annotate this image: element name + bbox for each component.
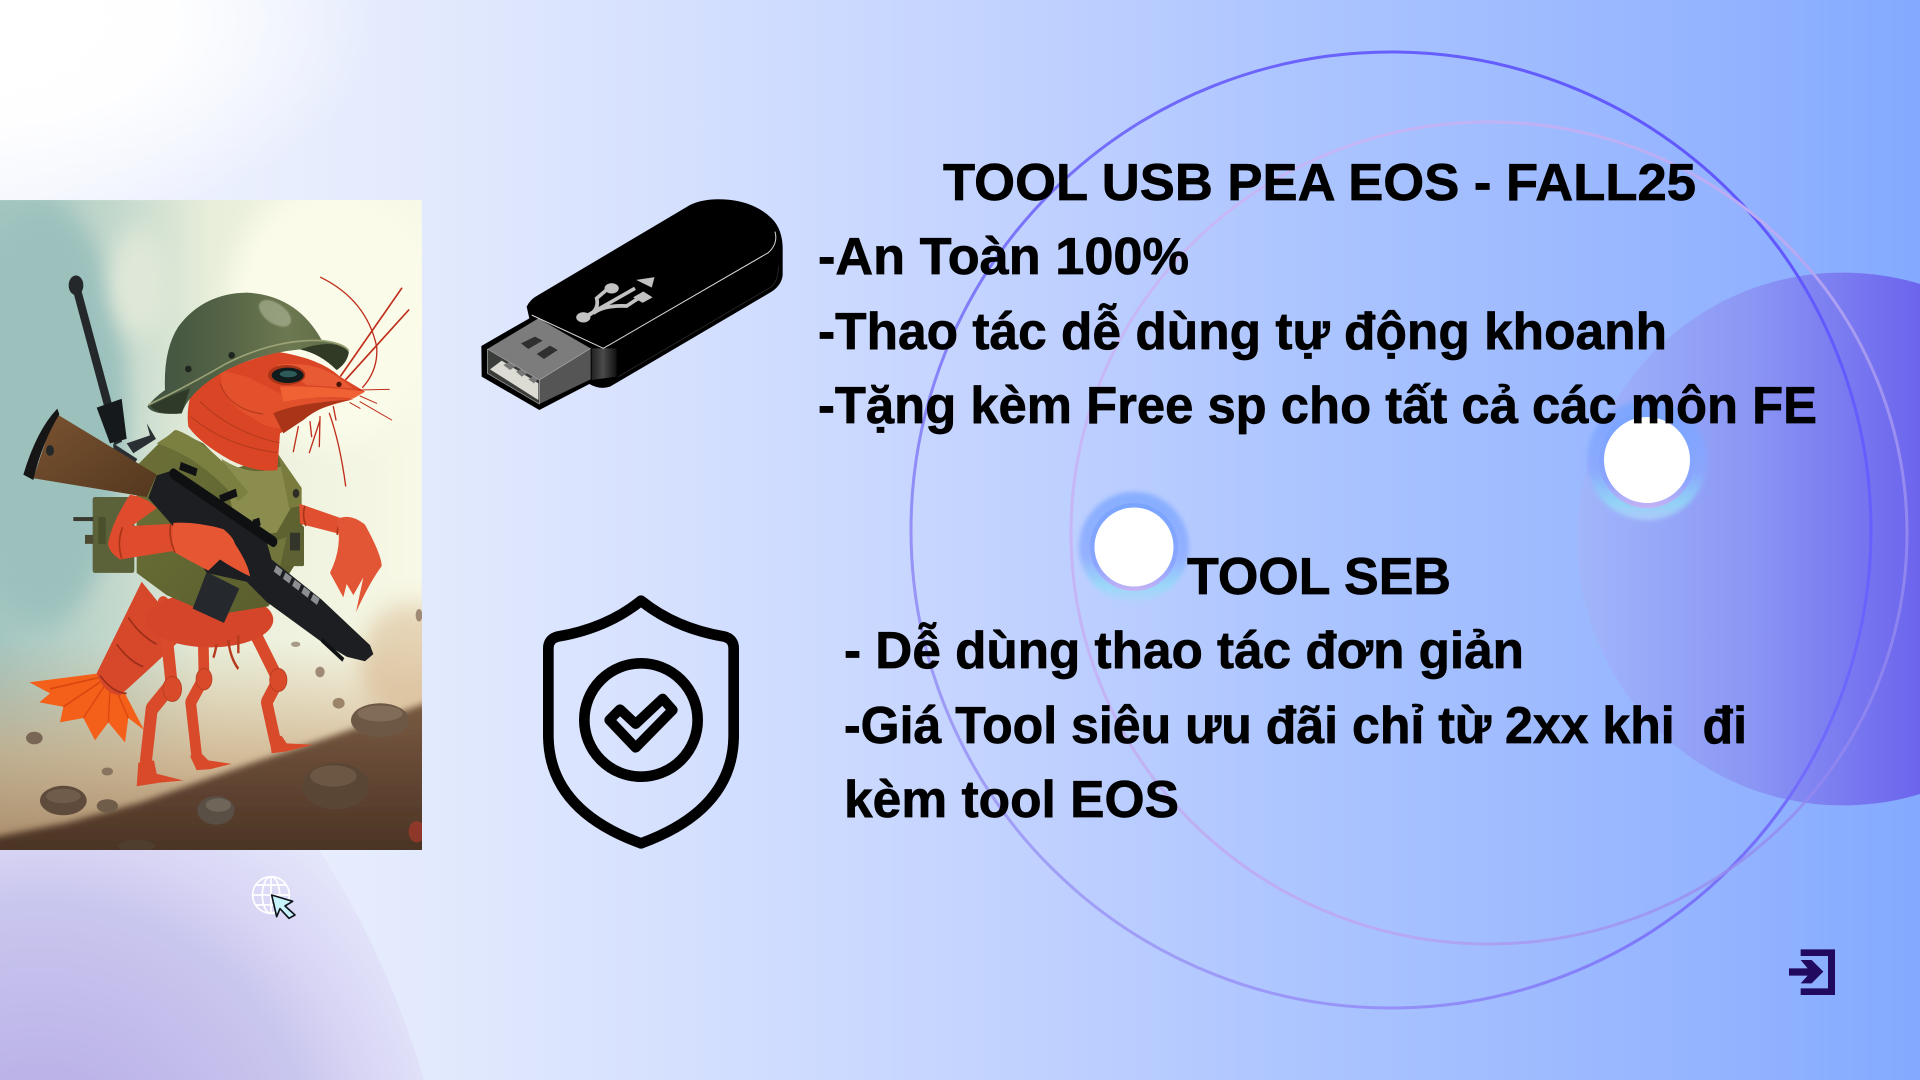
rifle magazine bbox=[193, 572, 239, 623]
usb symbol bbox=[576, 277, 654, 322]
shrimp head and helmet bbox=[147, 277, 409, 486]
large outline circle bbox=[911, 52, 1871, 1008]
text: thao tac: -Thao tác dễ dùng tự động khoanh bbox=[818, 303, 1667, 361]
text: gia tool: -Giá Tool siêu ưu đãi chỉ từ 2xx khi đi bbox=[844, 697, 1747, 755]
heading: tool usb: TOOL USB PEA EOS - FALL25 bbox=[943, 154, 1696, 212]
left hand bbox=[172, 523, 250, 576]
icon: shield with check bbox=[548, 601, 734, 843]
glowing dot right bbox=[1587, 400, 1707, 520]
legs bbox=[146, 604, 287, 760]
feet bbox=[137, 736, 313, 786]
icon: globe with cursor bbox=[253, 877, 295, 918]
white glow top left bbox=[0, 0, 380, 230]
feelers and antennae bbox=[293, 277, 409, 486]
icon: exit arrow bbox=[1789, 949, 1835, 995]
rocks bbox=[26, 609, 422, 824]
eye bbox=[268, 365, 305, 385]
text: kem tool: kèm tool EOS bbox=[844, 771, 1179, 829]
helmet bbox=[147, 293, 349, 414]
back pack box bbox=[93, 497, 134, 573]
neck and head bbox=[188, 352, 365, 471]
lilac outline circle bbox=[1071, 122, 1907, 944]
text: tang kem: -Tặng kèm Free sp cho tất cả các môn FE bbox=[818, 377, 1817, 435]
rear body segments bbox=[97, 582, 185, 696]
belly bbox=[168, 598, 274, 648]
photo: shrimp soldier with rifle bbox=[0, 200, 422, 850]
antenna barrel bbox=[69, 276, 156, 466]
text: de dung: - Dễ dùng thao tác đơn giản bbox=[844, 622, 1524, 680]
purple blob right bbox=[1577, 273, 1920, 805]
glowing dot left bbox=[1079, 492, 1189, 602]
rifle stock bbox=[33, 413, 157, 497]
heading: tool seb: TOOL SEB bbox=[1187, 548, 1451, 606]
vest bbox=[137, 430, 304, 615]
lilac blob bottom left bbox=[0, 845, 424, 1080]
text: an toan: -An Toàn 100% bbox=[818, 228, 1189, 286]
right arm and claw bbox=[299, 504, 340, 534]
icon: usb flash drive bbox=[481, 199, 783, 410]
rifle body bbox=[148, 470, 373, 661]
tail fan bbox=[29, 673, 144, 743]
left arm bbox=[108, 495, 177, 559]
